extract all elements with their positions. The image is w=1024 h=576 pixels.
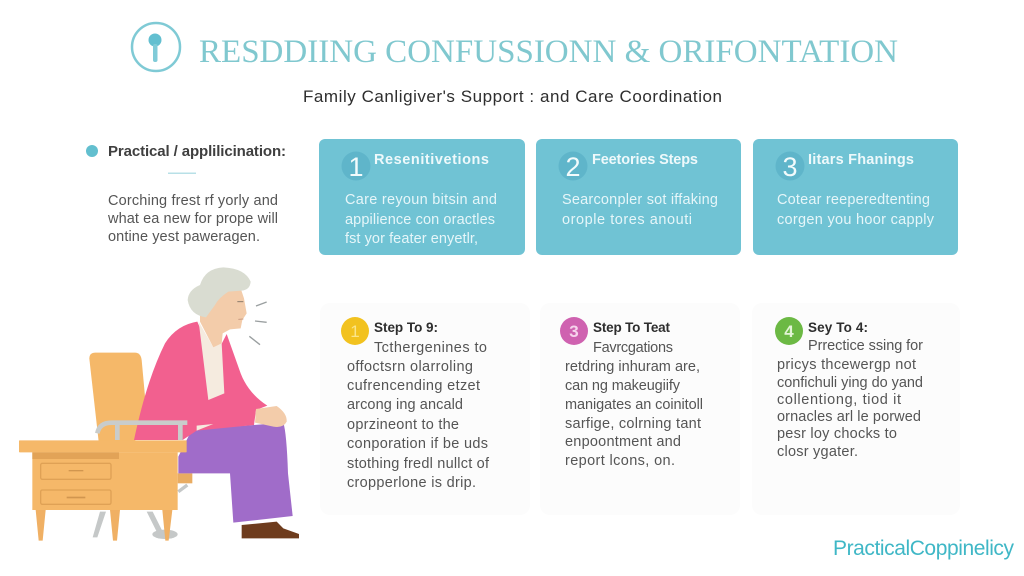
practical body text: what ea new for prope will — [107, 211, 278, 227]
step body: arcong ing ancald — [347, 397, 463, 413]
card 1 text: appilience con oractles — [345, 212, 495, 228]
mouth — [238, 317, 243, 321]
card 3 heading: Iitars Fhanings — [808, 152, 914, 168]
neck and face — [200, 288, 247, 347]
card 3 text: corgen you hoor capply — [777, 212, 935, 228]
step body: confichuli ying do yand — [777, 375, 923, 391]
woman — [134, 267, 299, 538]
bullet dot — [86, 145, 98, 157]
number badge 2 — [558, 152, 588, 182]
step body: manigates an coinitoll — [565, 397, 703, 413]
card 3 text — [777, 192, 935, 228]
number badge 3: 3 — [782, 152, 798, 182]
step body: can ng makeugiify — [565, 378, 681, 394]
magenta number badge: 3 — [569, 322, 579, 341]
logo wordmark: PracticalCoppinelicy — [833, 537, 1014, 560]
practical body text: Corching frest rf yorly and — [108, 193, 278, 209]
step body: sarfige, colrning tant — [565, 416, 701, 432]
legs: purple trousers — [178, 423, 293, 523]
hands — [255, 406, 287, 427]
step heading: Sey To 4: — [808, 320, 868, 335]
practical heading: Practical / applilicination: — [108, 143, 286, 160]
card 1 text — [345, 192, 497, 247]
eye — [237, 300, 243, 303]
pink cardigan — [134, 322, 267, 440]
green number badge — [775, 317, 803, 345]
step body: collentiong, tiod it — [777, 392, 901, 408]
step body: report lcons, on. — [565, 453, 675, 469]
number badge 2: 2 — [565, 152, 581, 182]
card 1 heading: Resenitivetions — [374, 152, 489, 168]
number badge 1: 1 — [348, 152, 364, 182]
card 1 text: Care reyoun bitsin and — [345, 192, 497, 208]
yellow number badge: 1 — [350, 322, 360, 341]
step body: cropperlone is drip. — [347, 475, 476, 491]
practical body text — [107, 193, 278, 245]
panel: step card left — [320, 303, 530, 515]
chair — [89, 353, 192, 539]
number badge 1 — [342, 152, 370, 182]
card 1 text: fst yor feater enyetlr, — [345, 231, 478, 247]
subtitle: Family Canligiver's Support : and Care Coordination — [303, 87, 722, 106]
card 2 heading: Feetories Steps — [592, 152, 698, 168]
step body: stothing fredl nullct of — [347, 456, 490, 472]
header — [132, 23, 898, 106]
nightstand — [19, 440, 187, 541]
panel: practical application — [86, 143, 286, 245]
cream shirt — [199, 322, 224, 400]
step body: enpoontment and — [565, 434, 681, 450]
card 2 text: oroplе tores anouti — [562, 212, 692, 228]
step body: pricys thcewergp not — [777, 357, 916, 373]
card 2 text — [562, 192, 718, 228]
panel: step card middle — [540, 303, 740, 515]
panel: teal card 1 — [319, 139, 525, 255]
step body: conporation if be uds — [347, 436, 488, 452]
title: RESDDIING CONFUSSIONN & ORIFONTATION — [199, 34, 898, 70]
short divider — [168, 172, 196, 174]
step body: oprzineont to the — [347, 417, 459, 433]
step body: Favrcgations — [593, 340, 673, 356]
hair — [188, 267, 251, 317]
green number badge: 4 — [784, 322, 794, 341]
icon: magnifier in circle — [132, 23, 180, 71]
shoes — [242, 522, 299, 538]
step body: closr ygater. — [777, 444, 858, 460]
step body — [777, 338, 923, 460]
armrest — [97, 423, 187, 440]
illustration: elderly woman seated beside nightstand — [19, 267, 299, 541]
step body: Tcthergenines to — [374, 340, 487, 356]
step body: Prrectice ssing for — [808, 338, 923, 354]
step body: ornacles arl le porwed — [777, 409, 921, 425]
step body: cufrencending etzet — [347, 378, 480, 394]
step body: retdring inhuram are, — [565, 359, 700, 375]
yellow number badge — [341, 317, 369, 345]
card 3 text: Cotear reeperedtenting — [777, 192, 930, 208]
panel: teal card 3 — [753, 139, 958, 255]
card 2 text: Searconpler sot iffaking — [562, 192, 718, 208]
step body — [565, 340, 703, 469]
speech marks — [249, 302, 267, 345]
step body: pesr loy chocks to — [777, 426, 897, 442]
step body — [347, 340, 490, 491]
magenta number badge — [560, 317, 588, 345]
step body: offoctsrn olarroling — [347, 359, 473, 375]
panel: teal card 2 — [536, 139, 741, 255]
step heading: Step To Teat — [593, 320, 670, 335]
step heading: Step To 9: — [374, 320, 438, 335]
practical body text: ontine yest paweragen. — [108, 229, 260, 245]
number badge 3 — [776, 152, 804, 182]
panel: step card right — [752, 303, 960, 515]
